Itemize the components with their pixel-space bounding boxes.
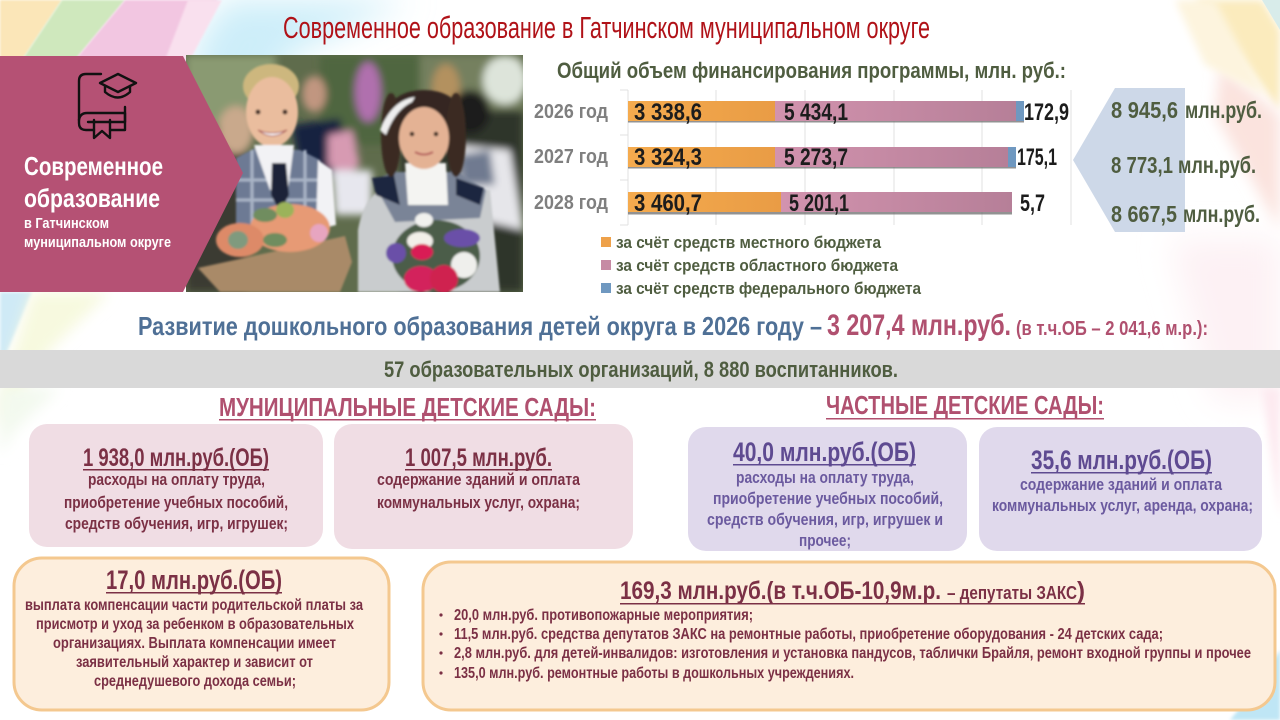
annual totals: млн.руб. — [1178, 152, 1256, 178]
card: municipal salaries: расходы на оплату труда, — [88, 471, 265, 489]
annual totals: 8 773,1 — [1111, 152, 1173, 178]
card: private maintenance — [979, 427, 1262, 551]
bar: 2028: 5,7 — [1020, 190, 1045, 217]
bar: 2027: 175,1 — [1017, 144, 1057, 171]
heading: municipal kindergartens: МУНИЦИПАЛЬНЫЕ ДЕТСКИЕ САДЫ: — [219, 392, 596, 422]
annual totals: 8 945,6 — [1111, 97, 1178, 123]
preschool funding heading: Развитие дошкольного образования детей округа в 2026 году – — [138, 311, 822, 341]
card: municipal maintenance: 1 007,5 млн.руб. — [405, 444, 552, 472]
card: municipal salaries: приобретение учебных пособий, — [64, 494, 288, 512]
bar: 2028: 3 460,7 — [634, 190, 702, 217]
chart legend — [601, 233, 921, 298]
chart legend: за счёт средств федерального бюджета — [616, 279, 921, 298]
arrow: annual totals — [1073, 88, 1185, 232]
title: Современное образование в Гатчинском муниципальном округе — [283, 10, 930, 45]
card: municipal salaries: средств обучения, игр, игрушек; — [65, 515, 288, 533]
card: private salaries: приобретение учебных пособий, — [713, 490, 943, 508]
year labels — [534, 101, 608, 214]
card: additional funding: ) — [1077, 577, 1085, 605]
card: private salaries: средств обучения, игр, игрушек и — [707, 511, 943, 529]
card: private maintenance: 35,6 млн.руб.(ОБ) — [1031, 445, 1212, 475]
card: private maintenance: содержание зданий и оплата — [1020, 476, 1223, 494]
card: parental fee compensation — [14, 558, 389, 710]
card: municipal salaries — [29, 424, 323, 547]
preschool funding heading: 3 207,4 млн.руб. — [827, 309, 1011, 342]
card: parental fee compensation: присмотр и уход за ребенком в образовательных — [36, 616, 354, 633]
bar: 2027: 3 324,3 — [634, 144, 702, 171]
photo: children with bouquets — [186, 55, 527, 293]
card: private salaries — [688, 427, 967, 551]
card: private salaries: 40,0 млн.руб.(ОБ) — [733, 437, 916, 467]
ribbon heading — [24, 151, 171, 251]
ribbon heading: муниципальном округе — [24, 234, 171, 251]
chart legend: за счёт средств местного бюджета — [616, 233, 881, 252]
annual totals: 8 667,5 — [1111, 201, 1177, 227]
ribbon heading: Современное — [24, 151, 163, 181]
card: additional funding: – депутаты ЗАКС — [947, 583, 1077, 603]
card: parental fee compensation: среднедушевого дохода семьи; — [94, 673, 296, 690]
panel: programme title ribbon — [0, 56, 243, 292]
card: municipal maintenance: коммунальных услуг, охрана; — [377, 494, 580, 512]
year labels: 2026 год — [534, 101, 608, 123]
bar: 2026: 3 338,6 — [634, 99, 702, 126]
stacked bar chart: funding by year — [534, 90, 1071, 225]
bullet list: 135,0 млн.руб. ремонтные работы в дошкольных учреждениях. — [454, 665, 854, 682]
bar: 2027 — [628, 144, 1057, 171]
bar: 2026: 172,9 — [1024, 99, 1069, 126]
card: private salaries: расходы на оплату труда, — [736, 469, 914, 487]
ribbon heading: образование — [24, 183, 160, 213]
ribbon heading: в Гатчинском — [24, 215, 109, 232]
annual totals — [1111, 97, 1262, 227]
card: parental fee compensation: выплата компенсации части родительской платы за — [25, 597, 363, 614]
card: private salaries: прочее; — [799, 532, 851, 550]
card: municipal salaries: 1 938,0 млн.руб.(ОБ) — [83, 444, 269, 472]
icon: book with graduation cap — [79, 74, 136, 138]
preschool funding heading: (в т.ч.ОБ – 2 041,6 м.р.): — [1016, 318, 1208, 340]
annual totals: млн.руб. — [1183, 201, 1260, 227]
year labels: 2028 год — [534, 192, 608, 214]
chart legend: за счёт средств областного бюджета — [616, 256, 898, 275]
bar: 2026: 5 434,1 — [784, 99, 848, 126]
grey band: organisations and pupils — [0, 350, 1280, 388]
year labels: 2027 год — [534, 146, 608, 168]
grey band: organisations and pupils: 57 образовательных организаций, 8 880 воспитанников. — [384, 357, 898, 382]
preschool funding heading — [138, 309, 1208, 342]
card: municipal maintenance: содержание зданий и оплата — [377, 471, 581, 489]
bar: 2027: 5 273,7 — [784, 144, 848, 171]
bar: 2028: 5 201,1 — [789, 190, 849, 217]
card: municipal maintenance — [334, 424, 633, 549]
bullet list: 20,0 млн.руб. противопожарные мероприятия; — [454, 607, 753, 624]
chart heading: Общий объем финансирования программы, млн. руб.: — [557, 58, 1066, 83]
heading: private kindergartens: ЧАСТНЫЕ ДЕТСКИЕ САДЫ: — [826, 390, 1104, 420]
bar: 2026 — [628, 99, 1069, 126]
card: additional funding: 169,3 млн.руб.(в т.ч.ОБ-10,9м.р. — [620, 577, 941, 605]
card: parental fee compensation: 17,0 млн.руб.(ОБ) — [106, 565, 282, 595]
bar: 2028 — [628, 190, 1045, 217]
card: parental fee compensation: организациях. Выплата компенсации имеет — [53, 635, 336, 652]
card: additional funding — [423, 562, 1275, 710]
bullet list — [439, 607, 1251, 682]
card: parental fee compensation: заявительный характер и зависит от — [76, 654, 313, 671]
